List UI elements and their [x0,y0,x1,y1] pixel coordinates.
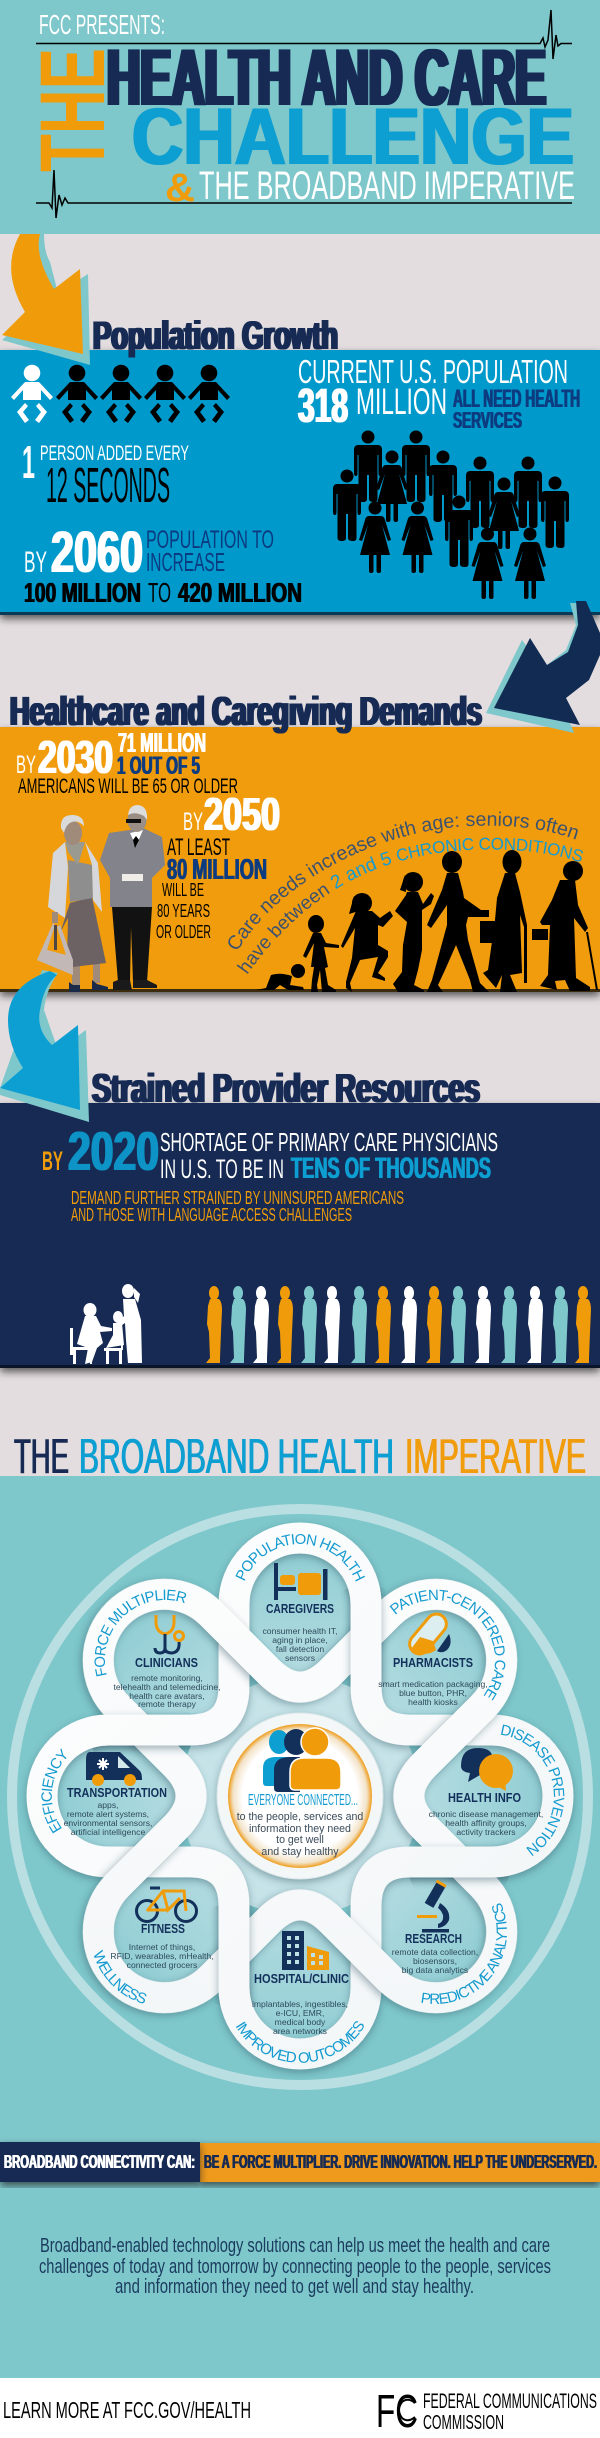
current population text: MILLION [356,381,447,422]
center disc: everyone connected: to the people, services and [237,1811,363,1823]
petal: fitness: RFID, wearables, mHealth, [110,1951,214,1961]
FCC presents: FCC PRESENTS: [39,9,165,40]
stat: by 2030: 2030 [38,731,113,783]
arrow: navy [486,601,600,733]
heading: the broadband health imperative: THE [14,1430,69,1484]
baby crawling [256,964,305,990]
stat: by 2050: OR OLDER [156,922,211,942]
petal: clinicians: health care avatars, [129,1691,205,1701]
ribbon labels [41,1534,564,2063]
current population text: SERVICES [453,407,522,433]
current population text [298,353,580,433]
petal: caregivers [262,1563,338,1663]
ribbon labels: PREDICTIVE ANALYTICS [422,1903,507,2004]
heading: the broadband health imperative: BROADBAND HEALTH [79,1430,394,1484]
icon: three people [263,1728,341,1792]
center disc: everyone connected [217,1713,383,1879]
stat: by 2050: 2050 [204,788,280,840]
footer [3,2385,597,2437]
current population text: 318 [298,380,348,433]
petal: caregivers: aging in place, [272,1635,328,1645]
ribbon labels: IMPROVED OUTCOMES [236,2021,364,2063]
petal: hospital clinic [252,1931,349,2036]
icon: hospital buildings [282,1931,329,1970]
stat: one person every 12 seconds: 1 [22,436,35,488]
petal: fitness: connected grocers [127,1960,197,1970]
diagram: broadband health knot [7,1504,593,2090]
icon: hospital bed [274,1563,328,1600]
stat: by 2020: 2020 [68,1120,159,1182]
petal: health info [429,1748,543,1837]
petal: hospital clinic: implantables, ingestibles, [252,1999,348,2009]
young woman [427,851,489,992]
petal: health info: activity trackers [456,1827,516,1837]
stat: by 2060: 420 MILLION [178,577,302,608]
center disc: everyone connected: information they need [249,1823,351,1835]
stat: by 2060: 100 MILLION [24,577,141,608]
stat: by 2050: 80 YEARS [157,901,210,921]
stat: by 2050: AT LEAST [167,834,230,861]
ribbon labels: FORCE MULTIPLIER [94,1590,186,1676]
arrow: blue [0,970,89,1122]
stat: by 2060: POPULATION TO [146,526,274,554]
petal: transportation: artificial intelligence [71,1827,145,1837]
petal: hospital clinic: area networks [273,2026,327,2036]
text: demand further strained [71,1188,404,1225]
panel: population growth: 12 SECONDS [46,459,170,513]
petal: pharmacists [378,1610,488,1707]
icon: doctor and patients [70,1284,142,1364]
stat: by 2060: TO [148,577,171,608]
working woman [480,850,527,992]
stat: by 2060 [24,520,302,608]
icon: FCC logo [376,2385,418,2437]
petal: clinicians: telehealth and telemedicine, [113,1682,221,1692]
petal: fitness [110,1888,214,1970]
agency name [423,2390,597,2434]
ribbon labels: POPULATION HEALTH [235,1534,365,1582]
silhouettes: stages of life [256,850,597,992]
petal: health info: HEALTH INFO [448,1791,521,1805]
ribbon labels: PATIENT-CENTERED CARE [390,1590,506,1700]
icon: stethoscope [155,1615,184,1653]
petal: health info: health affinity groups, [445,1818,527,1828]
petal: clinicians: CLINICIANS [135,1656,198,1670]
petal: transportation: environmental sensors, [64,1818,152,1828]
stat: by 2030: 71 MILLION [118,727,206,758]
petal: clinicians: remote therapy [138,1699,197,1709]
petal: transportation: TRANSPORTATION [67,1786,167,1800]
petal: research: remote data collection, [392,1947,478,1957]
ribbon labels: WELLNESS [94,1950,146,2004]
petal: pharmacists: smart medication packaging, [378,1679,488,1689]
text: demand further strained: DEMAND FURTHER STRAINED BY UNINSURED AMERICANS [71,1188,404,1208]
icon: row of babies [11,365,230,423]
petal: research: biosensors, [413,1956,457,1966]
petal: hospital clinic: medical body [275,2017,326,2027]
stat: by 2050 [156,788,280,942]
petal: research: RESEARCH [405,1932,462,1946]
petal: caregivers: consumer health IT, [262,1626,338,1636]
header title block [22,9,575,218]
ribbon labels: EFFICIENCY [41,1748,66,1834]
petal: research [392,1880,478,1975]
stat: by 2060: BY [24,546,47,579]
petal: research: big data analytics [402,1965,468,1975]
petal: pharmacists: PHARMACISTS [393,1656,473,1670]
petal backgrounds [50,1546,550,2046]
banner: broadband connectivity can: BROADBAND CONNECTIVITY CAN: [4,2152,195,2172]
panel: healthcare and caregiving demands [0,725,600,1002]
stat: by 2020: IN U.S. TO BE IN [160,1154,284,1184]
running girl [341,893,393,992]
icon: ambulance [86,1752,142,1786]
pulse line top [36,10,572,59]
stat: by 2030: 1 OUT OF 5 [117,752,200,780]
petal: health info: chronic disease management, [429,1809,543,1819]
stat: by 2030: BY [16,751,36,779]
icon: pill [406,1610,451,1658]
petal: transportation: remote alert systems, [67,1809,149,1819]
stat: by 2020: BY [42,1146,63,1176]
petal: fitness: Internet of things, [129,1942,195,1952]
figure: elderly man [100,805,165,990]
curved text: chronic conditions: have between 2 and 5 CHRONIC CONDITIONS [236,838,583,974]
heading: population growth: Population Growth [93,314,338,358]
stat: by 2050: WILL BE [162,880,204,900]
ampersand: & [165,166,195,210]
stat: by 2050: 80 MILLION [167,854,267,886]
petal: hospital clinic: HOSPITAL/CLINIC [254,1972,349,1986]
text: demand further strained: AND THOSE WITH LANGUAGE ACCESS CHALLENGES [71,1205,352,1225]
petal: pharmacists: blue button, PHR, [399,1688,467,1698]
icon: chat bubbles [461,1748,513,1791]
agency name: COMMISSION [423,2412,504,2434]
icon: bicycle [136,1888,196,1922]
paragraph: broadband-enabled solutions: and information they need to get well and stay healthy. [115,2276,474,2298]
stat: by 2020 [42,1120,498,1185]
banner: broadband connectivity can [0,2142,600,2182]
stat: by 2050: BY [183,808,203,836]
petal: caregivers: fall detection [276,1644,324,1654]
ribbon labels: DISEASE PREVENTION [501,1724,564,1856]
icon: crowd of people [333,430,569,599]
queue of waiting people [206,1286,591,1363]
stat: by 2030: AMERICANS WILL BE 65 OR OLDER [18,775,238,798]
arrow: orange [2,234,90,365]
learn more link text: LEARN MORE AT FCC.GOV/HEALTH [3,2397,251,2423]
icon: microscope [417,1880,449,1932]
interlaced ribbons [22,1522,578,2076]
paragraph: broadband-enabled solutions [39,2235,551,2298]
center disc: everyone connected: EVERYONE CONNECTED... [248,1792,358,1809]
center disc: everyone connected: to get well [276,1834,324,1846]
stat: one person every 12 seconds: PERSON ADDED EVERY [40,442,189,465]
petal: caregivers: CAREGIVERS [266,1602,334,1616]
elderly woman with cane [532,861,597,991]
panel: population growth [0,350,600,615]
petal: fitness: FITNESS [141,1922,185,1936]
stat: by 2030 [16,727,238,798]
petal: clinicians [113,1615,221,1709]
stat: one person every 12 seconds [22,436,189,513]
petal: hospital clinic: e-ICU, EMR, [276,2008,324,2018]
figure: elderly woman [37,815,108,992]
pulse line bottom [36,170,572,218]
petal: caregivers: sensors [285,1653,315,1663]
toddler [303,915,339,992]
petal: pharmacists: health kiosks [408,1697,458,1707]
curved text: care needs: Care needs increase with age: seniors often [228,812,578,949]
petal: transportation [64,1752,167,1837]
icon: FCC logo: FC [376,2385,418,2437]
stat: by 2060: INCREASE [146,547,225,577]
petal: transportation: apps, [97,1800,119,1810]
center disc: everyone connected: and stay healthy [261,1846,339,1858]
stat: by 2060: 2060 [51,520,143,585]
panel: strained provider resources [0,1103,600,1368]
petal: clinicians: remote monitoring, [131,1673,203,1683]
teen [393,872,434,992]
